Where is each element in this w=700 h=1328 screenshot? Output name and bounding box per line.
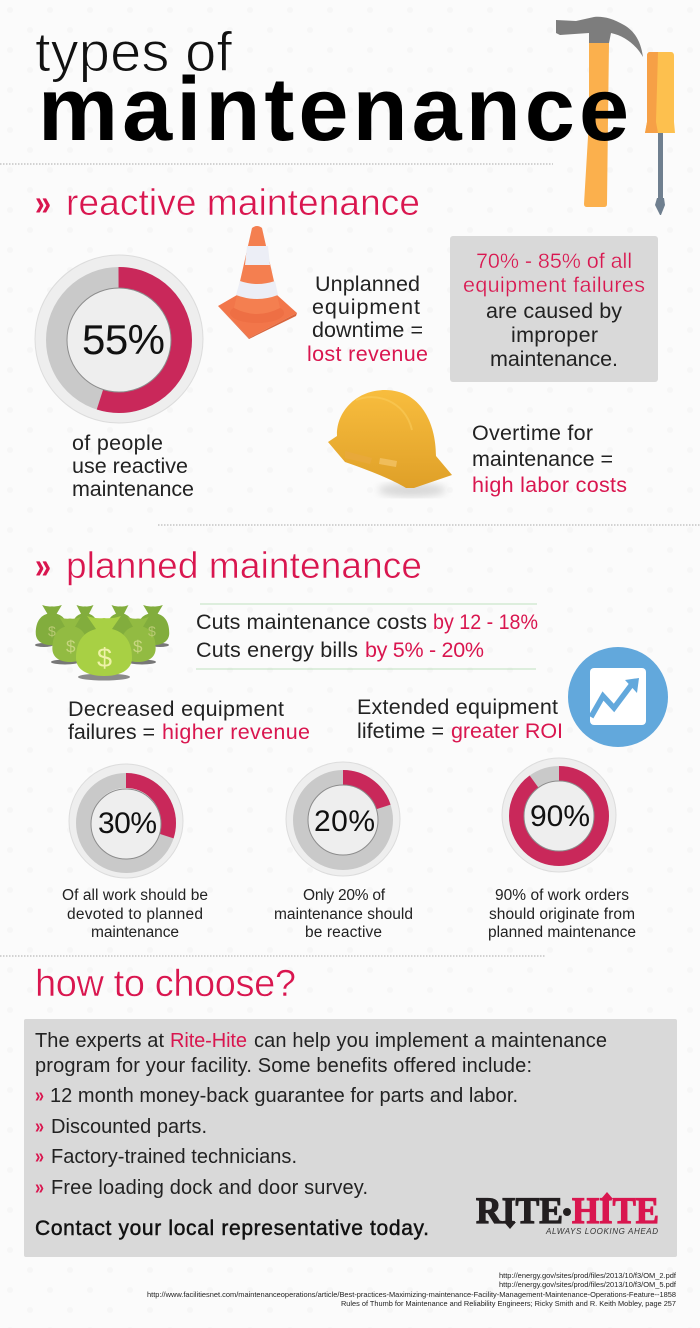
text: overtime: high labor costs xyxy=(472,473,627,497)
panel: equipment failures callout: maintenance. xyxy=(490,347,618,371)
icon: money bags: $ xyxy=(97,643,112,673)
text: overtime xyxy=(472,421,627,497)
panel: equipment failures callout xyxy=(450,236,658,382)
text: decreased equipment failures xyxy=(68,697,310,744)
caption: 90% xyxy=(488,887,636,941)
list: benefits xyxy=(35,1085,518,1199)
text: unplanned downtime: Unplanned xyxy=(315,272,420,296)
call to action: Contact your local representative today. xyxy=(35,1217,429,1240)
caption: 30% xyxy=(62,887,208,941)
logo: Rite-Hite xyxy=(476,1191,659,1236)
caption: 20%: Only 20% of xyxy=(303,887,386,904)
text: unplanned downtime: lost revenue xyxy=(307,342,428,366)
text: intro xyxy=(35,1030,607,1077)
heading: planned maintenance: » xyxy=(35,545,51,586)
caption: 30%: Of all work should be xyxy=(62,887,208,904)
title: types of xyxy=(35,20,232,83)
heading: reactive maintenance: » xyxy=(35,182,51,223)
icon: traffic cone xyxy=(218,226,297,339)
logo: Rite-Hite: RITE xyxy=(476,1191,563,1232)
chart: 20% donut xyxy=(286,762,400,876)
title: maintenance xyxy=(38,60,629,160)
icon: money bags: $ xyxy=(66,637,76,656)
list: benefits: » xyxy=(35,1177,44,1199)
text: extended equipment lifetime: lifetime = xyxy=(357,719,444,743)
list: benefits: Factory-trained technicians. xyxy=(51,1146,297,1168)
text: cost savings: Cuts maintenance costs xyxy=(196,610,427,634)
heading: planned maintenance: planned maintenance xyxy=(66,545,422,586)
icon: money bags: $ xyxy=(148,623,156,639)
chart: 55% donut: 55% xyxy=(82,316,165,363)
heading: how to choose: how to choose? xyxy=(35,963,296,1005)
caption: 20%: maintenance should xyxy=(274,906,413,923)
icon: hammer xyxy=(556,17,643,207)
panel: equipment failures callout: equipment failures xyxy=(463,273,645,297)
icon: screwdriver xyxy=(645,52,675,215)
caption: 90%: should originate from xyxy=(489,906,635,923)
text: unplanned downtime: equipment xyxy=(312,295,420,319)
footnotes: sources: http://www.facilitiesnet.com/maintenanceoperations/article/Best-practices-Maximizing-maintenance-Facility-Management-Maintenance-Operations-Feature--1858 xyxy=(147,1290,676,1299)
chart: 90% donut xyxy=(502,758,616,872)
logo: Rite-Hite: ALWAYS LOOKING AHEAD xyxy=(545,1227,658,1236)
text: of people use reactive maintenance: of people xyxy=(72,431,163,455)
caption: 90%: 90% of work orders xyxy=(495,887,629,904)
text: unplanned downtime: downtime = xyxy=(312,318,423,342)
text: overtime: Overtime for xyxy=(472,421,593,445)
chart: 90% donut: 90% xyxy=(530,800,590,833)
footnotes: sources xyxy=(147,1271,677,1308)
panel: equipment failures callout: are caused by xyxy=(486,299,622,323)
list: benefits: » xyxy=(35,1146,44,1168)
text: extended equipment lifetime: greater ROI xyxy=(451,719,563,743)
text: intro: Rite-Hite xyxy=(170,1030,247,1052)
text: of people use reactive maintenance xyxy=(72,431,194,501)
list: benefits: Discounted parts. xyxy=(51,1116,207,1138)
list: benefits: » xyxy=(35,1085,44,1107)
text: cost savings xyxy=(196,610,538,662)
list: benefits: Free loading dock and door survey. xyxy=(51,1177,368,1199)
text: decreased equipment failures: failures = xyxy=(68,720,155,744)
caption: 30%: devoted to planned xyxy=(67,906,203,923)
text: cost savings: by 5% - 20% xyxy=(365,638,484,662)
text: decreased equipment failures: higher revenue xyxy=(162,720,310,744)
caption: 20% xyxy=(274,887,413,941)
logo: Rite-Hite: HITE xyxy=(572,1191,659,1232)
caption: 90%: planned maintenance xyxy=(488,924,636,941)
text: extended equipment lifetime: Extended equipment xyxy=(357,695,558,719)
chart: 55% donut xyxy=(35,255,203,423)
text: overtime: maintenance = xyxy=(472,447,613,471)
text: intro: The experts at xyxy=(35,1030,164,1052)
list: benefits: » xyxy=(35,1116,44,1138)
text: cost savings: by 12 - 18% xyxy=(433,610,538,634)
text: intro: can help you implement a maintenance xyxy=(254,1030,607,1052)
panel: equipment failures callout: 70% - 85% of all xyxy=(476,249,632,273)
caption: 30%: maintenance xyxy=(91,924,179,941)
text: cost savings: Cuts energy bills xyxy=(196,638,358,662)
text: of people use reactive maintenance: use reactive xyxy=(72,454,188,478)
heading: reactive maintenance: reactive maintenance xyxy=(66,182,420,223)
icon: money bags: $ xyxy=(133,637,143,656)
text: decreased equipment failures: Decreased equipment xyxy=(68,697,284,721)
text: extended equipment lifetime xyxy=(357,695,563,743)
panel: equipment failures callout: improper xyxy=(511,323,598,347)
list: benefits: 12 month money-back guarantee for parts and labor. xyxy=(50,1085,518,1107)
chart: 30% donut: 30% xyxy=(98,807,157,840)
icon: money bags xyxy=(35,605,169,680)
icon: money bags: $ xyxy=(48,623,56,639)
icon: hard hat xyxy=(328,390,452,497)
text: of people use reactive maintenance: maintenance xyxy=(72,477,194,501)
icon: growth chart xyxy=(568,647,668,747)
text: unplanned downtime xyxy=(307,272,428,366)
footnotes: sources: http://energy.gov/sites/prod/files/2013/10/f3/OM_2.pdf xyxy=(499,1271,677,1280)
footnotes: sources: http://energy.gov/sites/prod/files/2013/10/f3/OM_5.pdf xyxy=(499,1280,677,1289)
footnotes: sources: Rules of Thumb for Maintenance and Reliability Engineers; Ricky Smith and R. Keith Mobley, page 257 xyxy=(341,1299,676,1308)
caption: 20%: be reactive xyxy=(305,924,382,941)
text: intro: program for your facility. Some benefits offered include: xyxy=(35,1055,532,1077)
chart: 30% donut xyxy=(69,764,183,878)
chart: 20% donut: 20% xyxy=(314,805,375,838)
panel: how to choose xyxy=(24,1019,677,1257)
